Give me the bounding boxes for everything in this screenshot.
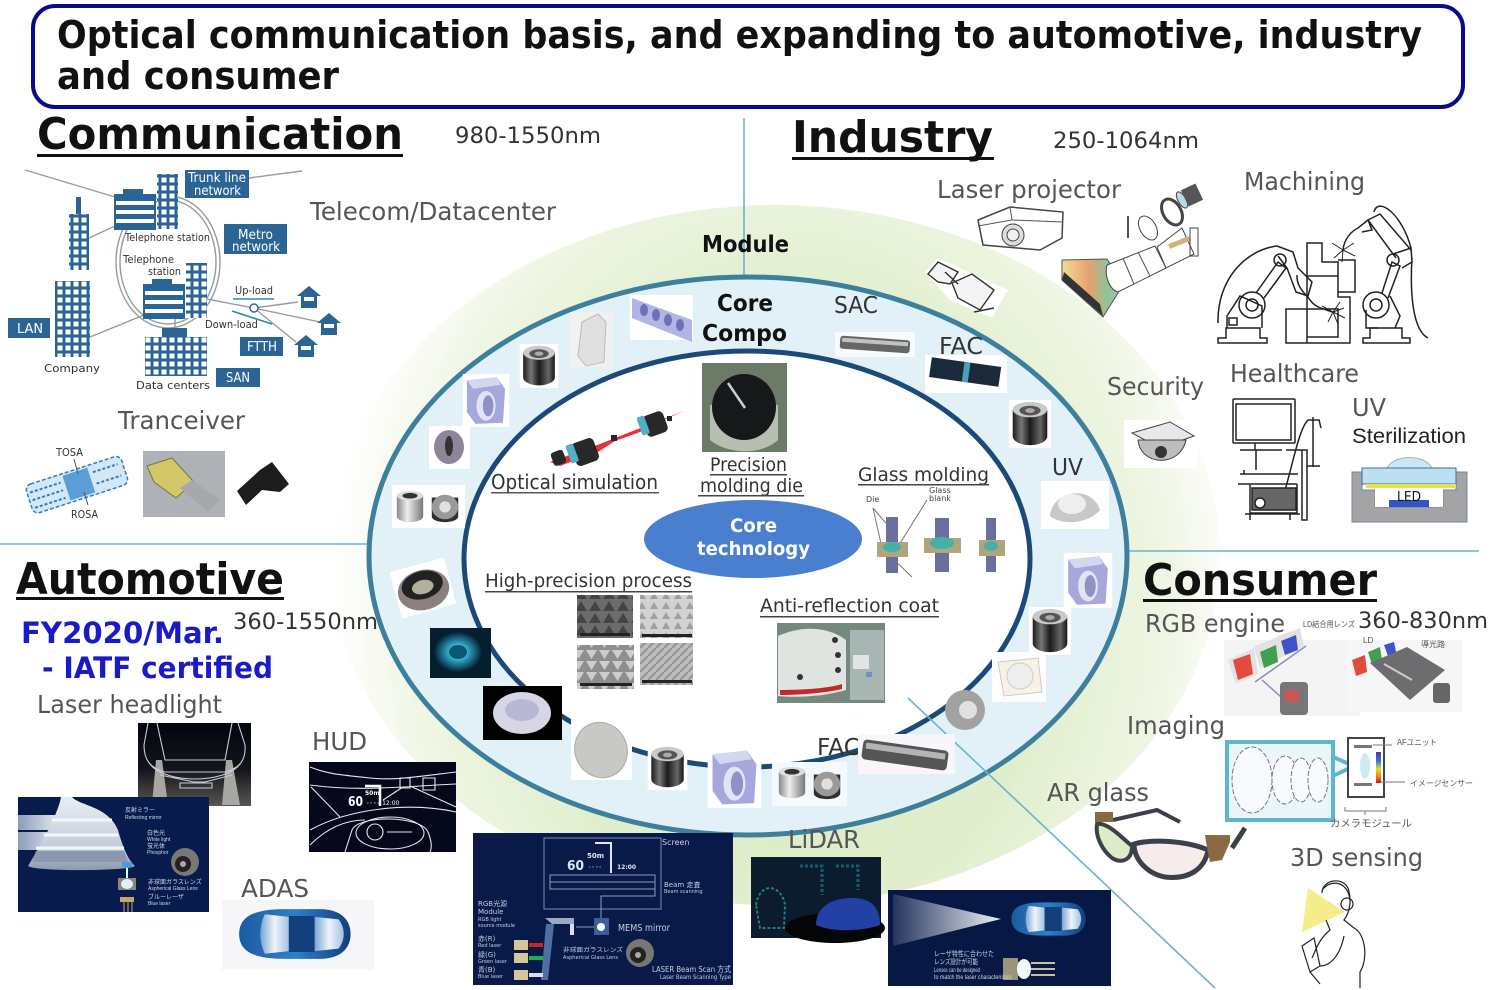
panel: laser beam scan HUD diagram: 赤(R) <box>478 935 496 943</box>
panel: laser beam scan HUD diagram: Beam scanning <box>664 889 703 895</box>
panel: laser beam scan HUD diagram: Red laser <box>478 943 502 949</box>
panel: telecom network diagram: Down-load <box>205 318 258 331</box>
core technology badge: technology <box>697 538 811 560</box>
label: ADAS: ADAS <box>241 874 309 903</box>
sector dividing line: right <box>1028 550 1479 552</box>
panel: LiDAR beam and car: レーザ特性に合わせた <box>934 949 994 958</box>
core components ring <box>369 277 1127 835</box>
wavelength: automotive: 360-1550nm <box>233 610 378 635</box>
panel: laser beam scan HUD diagram: source module <box>478 923 515 929</box>
label: Optical simulation: Optical simulation <box>491 470 658 494</box>
panel: telecom network diagram: Telephone station <box>124 231 210 244</box>
heading: Automotive: Automotive <box>16 554 284 605</box>
heading: Consumer: Consumer <box>1143 555 1377 606</box>
certification note: - IATF certified <box>42 651 273 685</box>
image: LiDAR point cloud <box>751 857 885 943</box>
label: Tranceiver: Tranceiver <box>117 406 246 435</box>
panel: laser headlight module: ブルーレーザ <box>148 893 184 901</box>
ring component images <box>390 295 1112 808</box>
machining robots line art <box>1218 206 1428 343</box>
label: Telecom/Datacenter: Telecom/Datacenter <box>309 197 557 226</box>
RGB engine right diagram <box>1347 636 1462 712</box>
RGB engine right diagram: LD <box>1363 636 1373 645</box>
glass molding diagram: Die <box>866 495 879 504</box>
label: UV Sterilization: UV <box>1352 393 1386 422</box>
panel: HUD windshield view: 60 <box>348 795 363 810</box>
label: Precision molding die: molding die <box>700 475 803 497</box>
label: UV Sterilization <box>1352 393 1466 448</box>
panel: LiDAR beam and car <box>888 890 1111 986</box>
label: Imaging: Imaging <box>1127 711 1225 740</box>
sector dividing line: diagonal <box>908 698 1215 988</box>
glass molding diagram: Glass <box>929 486 951 495</box>
panel: telecom network diagram: Metro <box>238 228 273 243</box>
panel: LiDAR beam and car: Lenses can be designed <box>934 968 980 974</box>
photo: precision molding die <box>702 363 787 452</box>
label: Machining: Machining <box>1244 167 1365 196</box>
panel: laser beam scan HUD diagram: Blue laser <box>478 974 504 980</box>
label: Glass molding: Glass molding <box>858 464 989 486</box>
label: Healthcare: Healthcare <box>1230 359 1359 388</box>
panel: telecom network diagram: network <box>232 240 280 255</box>
panel: telecom network diagram: Telephone <box>122 253 174 266</box>
panel: laser beam scan HUD diagram: Laser Beam Scanning Type <box>660 974 731 981</box>
panel: HUD windshield view <box>309 762 456 852</box>
panel: laser beam scan HUD diagram: LASER Beam Scan 方式 <box>652 964 731 974</box>
imaging lens callout diagram: AFユニット <box>1397 738 1437 747</box>
panel: telecom network diagram: station <box>148 265 181 278</box>
label: UV Sterilization: Sterilization <box>1352 425 1466 448</box>
panel: laser headlight module: Reflecting mirror <box>125 815 162 821</box>
panel: laser beam scan HUD diagram: RGB光源 <box>478 899 507 908</box>
title box: and consumer <box>57 54 339 98</box>
panel: laser beam scan HUD diagram: 12:00 <box>617 864 636 871</box>
title box <box>33 6 1463 107</box>
wavelength: industry: 250-1064nm <box>1053 129 1199 154</box>
panel: laser beam scan HUD diagram: Aspherical Glass Lens <box>563 955 618 961</box>
panel: laser beam scan HUD diagram: 青(B) <box>478 965 496 974</box>
panel: laser headlight module: Aspherical Glass Lens <box>148 886 198 892</box>
label: HUD: HUD <box>312 727 367 756</box>
label: Laser headlight: Laser headlight <box>37 690 222 719</box>
icon: person with smartphone and 3D sensing beam <box>1302 881 1365 988</box>
panel: laser beam scan HUD diagram: Beam 走査 <box>664 880 700 889</box>
UV LED package diagram <box>1352 458 1467 522</box>
imaging lens callout diagram: カメラモジュール <box>1330 818 1412 830</box>
panel: laser beam scan HUD diagram: Green laser <box>478 959 508 965</box>
label: Core Compo: Compo <box>702 321 787 347</box>
transceiver module images: TOSA <box>55 446 83 459</box>
label: Security: Security <box>1107 372 1204 401</box>
wavelength: consumer: 360-830nm <box>1358 609 1488 634</box>
panel: laser headlight module: White light <box>147 837 171 843</box>
sector dividing line: top <box>743 118 745 352</box>
panel: laser headlight module: Blue laser <box>148 901 171 907</box>
label: LiDAR: LiDAR <box>788 825 860 854</box>
label: Precision molding die: Precision <box>710 454 787 476</box>
panel: laser headlight module <box>18 797 209 912</box>
panel: laser headlight module: Phosphor <box>147 850 169 856</box>
panel: HUD windshield view: ◦◦◦◦ 12:00 <box>366 800 400 807</box>
panel: laser beam scan HUD diagram: ◦◦◦◦ <box>588 864 602 871</box>
wavelength: communication: 980-1550nm <box>455 124 601 149</box>
glass molding diagram <box>866 486 1005 577</box>
photo: car headlight at night <box>138 723 251 806</box>
label: Laser projector: Laser projector <box>937 175 1122 204</box>
panel: laser beam scan HUD diagram: 60 <box>567 859 584 874</box>
image: AR glasses <box>1095 810 1245 877</box>
panel: LiDAR beam and car: レンズ設計が可能 <box>934 957 978 966</box>
label: SAC: SAC <box>834 293 878 319</box>
label: Module: Module <box>702 232 789 258</box>
transceiver module images <box>25 446 289 521</box>
panel: laser headlight module: 非球面ガラスレンズ <box>148 878 202 886</box>
RGB engine left diagram: LD結合用レンズ <box>1303 619 1355 629</box>
label: FAC top: FAC <box>939 334 983 360</box>
panel: laser beam scan HUD diagram: Module <box>478 908 503 916</box>
label: RGB engine: RGB engine <box>1145 609 1285 638</box>
label: FAC bottom: FAC <box>817 735 860 761</box>
background: green module ellipse <box>330 205 1220 905</box>
panel: laser beam scan HUD diagram: 50m <box>587 852 604 860</box>
panel: laser beam scan HUD diagram <box>473 833 733 985</box>
panel: laser headlight module: 白色光 <box>147 829 165 837</box>
panel: telecom network diagram: Trunk line <box>187 171 246 186</box>
image: ADAS car <box>222 900 374 970</box>
panel: telecom network diagram: FTTH <box>247 340 277 355</box>
label: AR glass: AR glass <box>1047 778 1149 807</box>
optical simulation beam graphic <box>550 410 684 467</box>
panel: telecom network diagram <box>8 170 341 392</box>
panel: HUD windshield view: 50m <box>365 790 380 797</box>
sector dividing line: left <box>0 543 465 545</box>
core technology badge: Core <box>730 515 777 537</box>
certification note: FY2020/Mar. <box>21 616 224 650</box>
panel: LiDAR beam and car: to match the laser characteristics <box>934 975 1012 981</box>
label: Anti-reflection coat: Anti-reflection coat <box>760 595 939 617</box>
certification note <box>21 616 273 685</box>
label: UV ring: UV <box>1052 455 1083 481</box>
panel: telecom network diagram: Data centers <box>136 379 210 392</box>
panel: telecom network diagram: network <box>194 184 241 199</box>
icon: dome camera <box>1124 420 1197 468</box>
core technology badge <box>644 500 862 578</box>
label: Core Compo: Core <box>717 291 773 317</box>
heading: Industry: Industry <box>792 112 993 163</box>
imaging lens callout diagram <box>1227 738 1473 830</box>
photo: coating chamber <box>777 623 885 703</box>
panel: laser beam scan HUD diagram: RGB light <box>478 917 501 923</box>
panel: laser beam scan HUD diagram: Screen <box>662 838 690 847</box>
heading: Communication: Communication <box>37 109 403 160</box>
panel: laser beam scan HUD diagram: MEMS mirror <box>618 923 671 934</box>
panel: telecom network diagram: Up-load <box>235 284 273 297</box>
label: 3D sensing: 3D sensing <box>1290 843 1423 872</box>
healthcare endoscope cart <box>1233 399 1321 520</box>
panel: laser headlight module: 蛍光体 <box>147 842 165 850</box>
panel: laser beam scan HUD diagram: 非球面ガラスレンズ <box>563 946 623 954</box>
label: High-precision process: High-precision process <box>485 570 692 592</box>
imaging lens callout diagram: イメージセンサー <box>1410 779 1473 788</box>
transceiver module images: ROSA <box>71 508 98 521</box>
process micrographs <box>577 595 693 689</box>
label: Core Compo <box>702 291 787 347</box>
RGB engine left diagram <box>1224 619 1360 716</box>
panel: telecom network diagram: Company <box>44 362 101 375</box>
label: Precision molding die <box>698 454 804 497</box>
RGB engine right diagram: 導光路 <box>1421 639 1445 649</box>
UV LED package diagram: LED <box>1397 490 1421 505</box>
panel: telecom network diagram: LAN <box>17 322 43 337</box>
glass molding diagram: blank <box>929 494 951 503</box>
panel: telecom network diagram: SAN <box>226 371 250 386</box>
inner core technology ellipse <box>464 351 1030 767</box>
panel: laser headlight module: 反射ミラー <box>125 806 155 814</box>
panel: laser beam scan HUD diagram: 緑(G) <box>478 950 496 959</box>
laser projector images <box>925 183 1203 318</box>
